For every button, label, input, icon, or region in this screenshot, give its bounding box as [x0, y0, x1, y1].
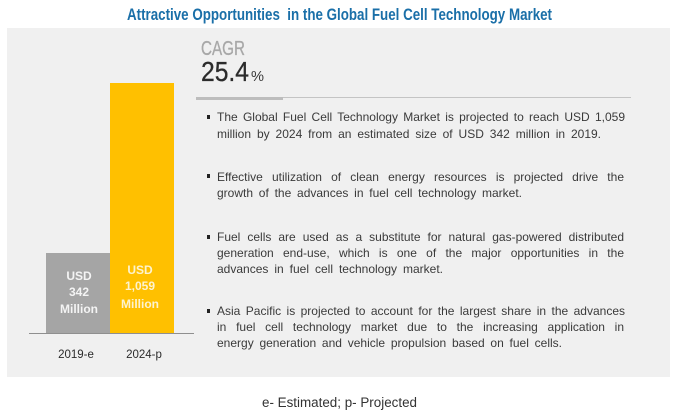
- bar label: USD 1,059 Million: [121, 263, 159, 311]
- text: million by 2024 from an estimated size of USD 342 million in 2019.: [217, 127, 601, 141]
- bar label: USD 342 Million: 342: [69, 285, 89, 299]
- CAGR label: CAGR: [201, 38, 245, 60]
- text: advances in fuel cell technology market.: [217, 262, 443, 276]
- header divider: [196, 97, 631, 100]
- text: Effective utilization of clean energy resources is projected drive the: [217, 170, 624, 184]
- bar chart: [29, 83, 194, 361]
- bullet 2: [207, 170, 624, 200]
- bar label: USD 1,059 Million: USD: [127, 263, 153, 277]
- bar label: USD 1,059 Million: 1,059: [125, 279, 155, 293]
- text: growth of the advances in fuel cell technology market.: [217, 186, 522, 200]
- axis label: 2019-e: 2019-e: [58, 349, 94, 361]
- footnote: e- Estimated; p- Projected: [262, 395, 417, 410]
- bullet 4: [207, 304, 625, 350]
- bar: 2024 projected: [110, 83, 174, 334]
- bar label: USD 342 Million: Million: [60, 302, 98, 316]
- bar label: USD 342 Million: [60, 269, 98, 316]
- text: Asia Pacific is projected to account for the largest share in the advances: [217, 304, 625, 318]
- text: energy generation and vehicle propulsion based on fuel cells.: [217, 336, 562, 350]
- axis baseline: [29, 333, 194, 334]
- bar label: USD 342 Million: USD: [66, 269, 92, 283]
- bullet 1: [207, 110, 625, 141]
- text: generation end-use, which is one of the major opportunities in the: [217, 246, 624, 260]
- text: Fuel cells are used as a substitute for natural gas-powered distributed: [217, 230, 624, 244]
- bar label: USD 1,059 Million: Million: [121, 297, 159, 311]
- bar: 2019 estimated: [46, 253, 110, 334]
- text: in fuel cell technology market due to the increasing application in: [217, 320, 624, 334]
- bullet 3: [207, 230, 624, 276]
- title: Attractive Opportunities in the Global Fuel Cell Technology Market: [127, 5, 552, 24]
- axis label: 2024-p: 2024-p: [126, 349, 162, 361]
- text: The Global Fuel Cell Technology Market is projected to reach USD 1,059: [217, 110, 625, 124]
- CAGR value: 25.4: [201, 56, 249, 87]
- percent sign: %: [251, 68, 264, 85]
